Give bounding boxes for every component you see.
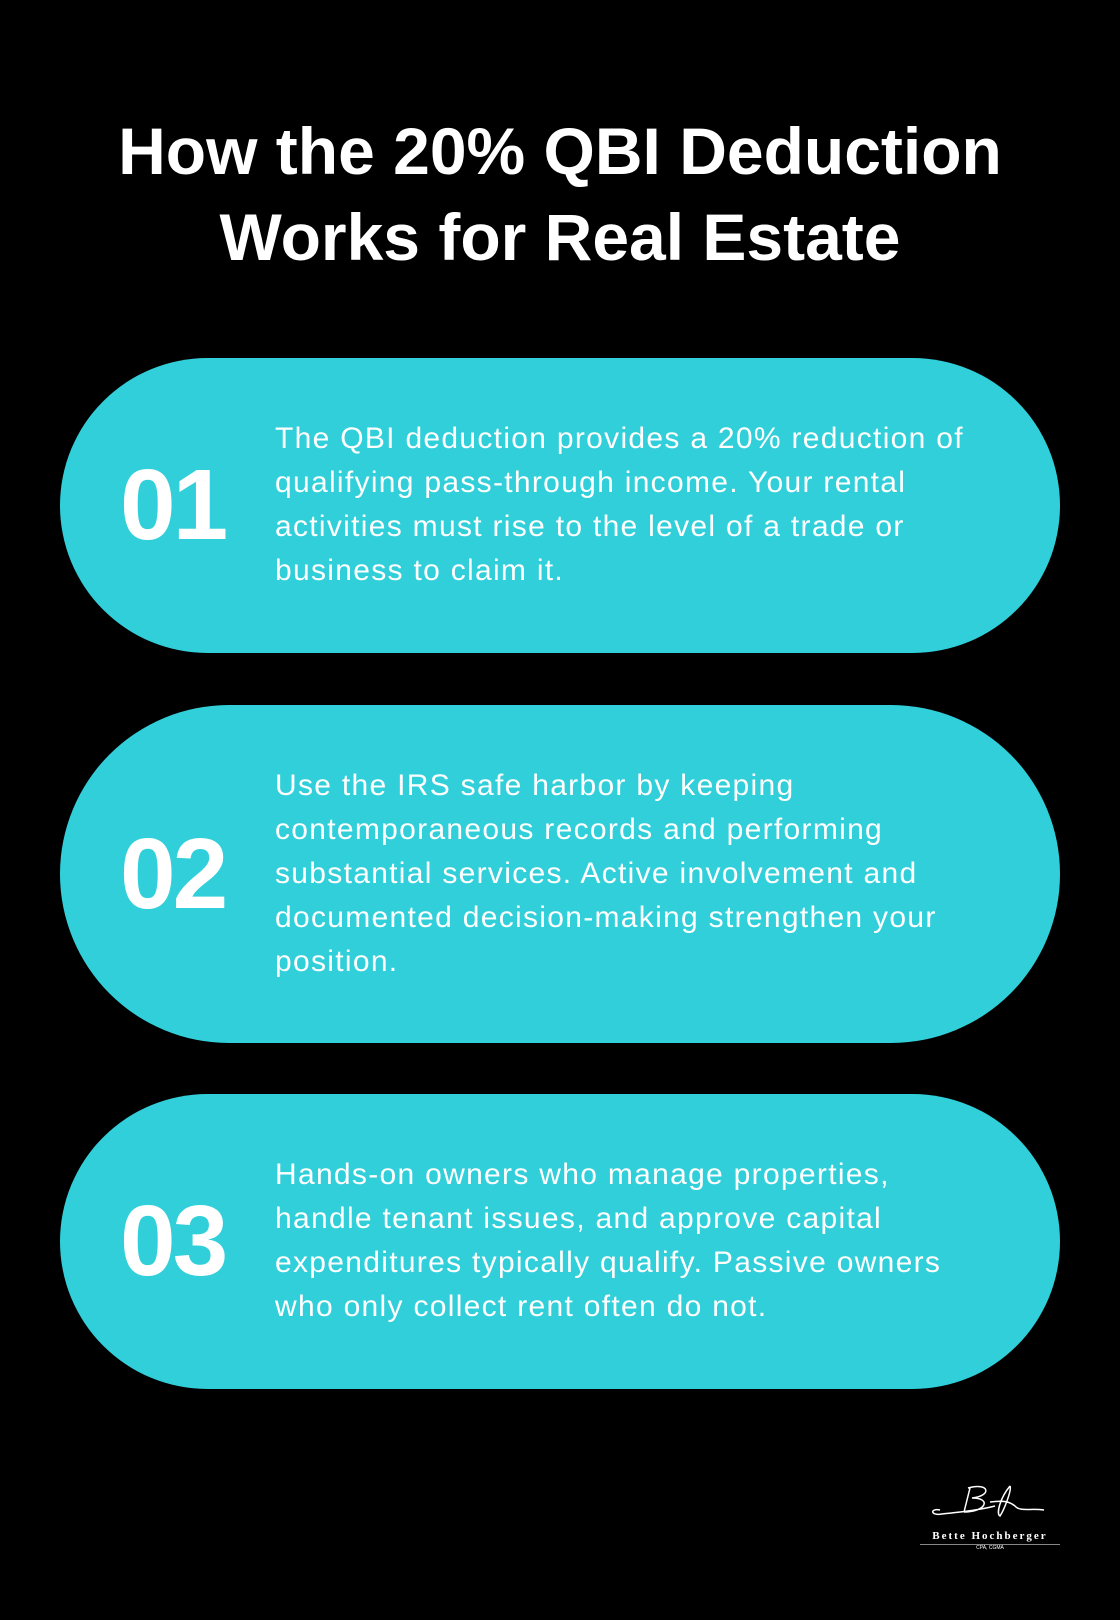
text step 2: contemporaneous records and performing xyxy=(275,813,883,846)
text step 3: who only collect rent often do not. xyxy=(275,1290,767,1323)
text step 1: The QBI deduction provides a 20% reduction of xyxy=(275,422,964,455)
panel: step 1 xyxy=(60,358,1060,653)
text step 3: Hands-on owners who manage properties, xyxy=(275,1158,890,1191)
text step 1 xyxy=(275,422,964,587)
text step 2: Use the IRS safe harbor by keeping xyxy=(275,769,794,802)
text step 1: business to claim it. xyxy=(275,554,564,587)
title xyxy=(118,114,1002,274)
text step 3: handle tenant issues, and approve capital xyxy=(275,1202,882,1235)
text step 2 xyxy=(275,769,937,978)
text step 1: activities must rise to the level of a trade or xyxy=(275,510,905,543)
panel: step 2 xyxy=(60,705,1060,1043)
logo: CPA, CGMA xyxy=(976,1545,1004,1551)
logo: Bette Hochberger xyxy=(932,1530,1048,1542)
text step 3 xyxy=(275,1158,941,1323)
text step 2: substantial services. Active involvement and xyxy=(275,857,918,890)
text step 1: qualifying pass-through income. Your rental xyxy=(275,466,906,499)
number 03: 03 xyxy=(120,1185,225,1297)
number 01: 01 xyxy=(120,449,225,561)
text step 3: expenditures typically qualify. Passive owners xyxy=(275,1246,941,1279)
number 02: 02 xyxy=(120,818,225,930)
text step 2: position. xyxy=(275,945,398,978)
panel: step 3 xyxy=(60,1094,1060,1389)
title: Works for Real Estate xyxy=(219,200,900,274)
title: How the 20% QBI Deduction xyxy=(118,114,1002,188)
logo xyxy=(920,1486,1060,1551)
text step 2: documented decision-making strengthen your xyxy=(275,901,937,934)
